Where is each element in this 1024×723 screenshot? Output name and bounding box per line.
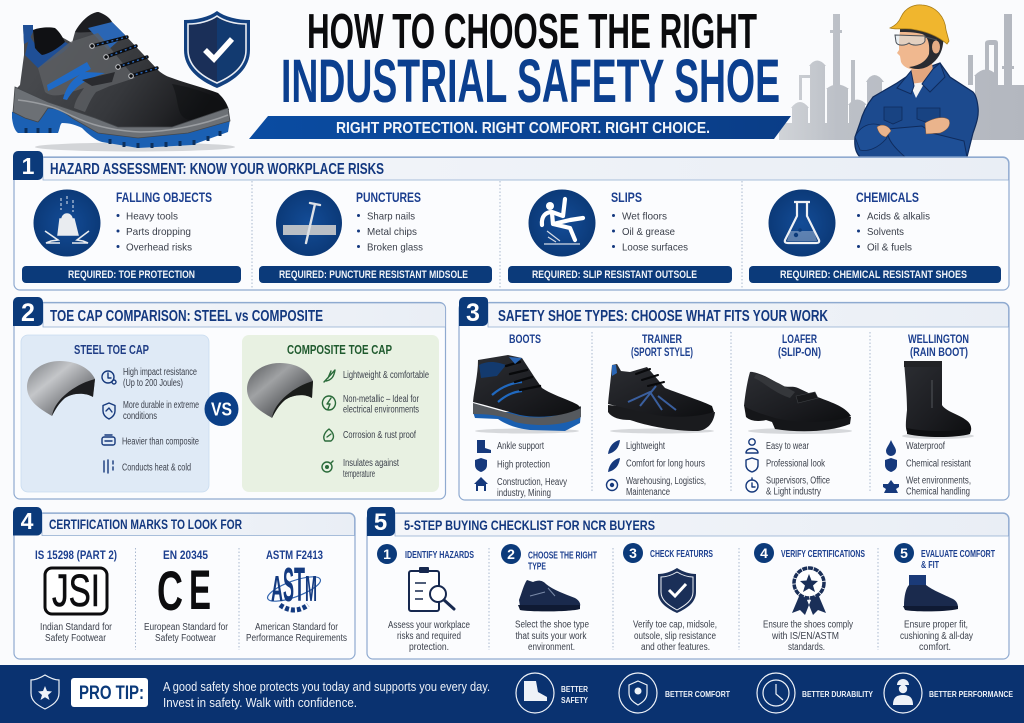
bullets	[857, 210, 930, 254]
feature icon: stopwatch	[746, 478, 758, 492]
trainer sole	[608, 405, 715, 431]
step title: & FIT	[921, 559, 939, 571]
caption	[144, 622, 229, 644]
icon: foot in shoe	[903, 575, 958, 611]
ribbon text: RIGHT PROTECTION. RIGHT COMFORT. RIGHT CHOICE.	[336, 120, 710, 137]
step text: Ensure the shoes comply	[763, 620, 853, 630]
requirement bar	[508, 266, 732, 283]
step text: Ensure proper fit,	[904, 620, 968, 630]
bullets: Overhead risks	[126, 242, 192, 254]
feature icon: boot	[477, 440, 491, 453]
feature text: Wet environments,	[906, 476, 971, 486]
shoe type: loafer	[744, 332, 852, 498]
step text: standards.	[788, 642, 825, 653]
boot outsole	[473, 412, 581, 431]
step text	[515, 620, 589, 653]
steel toe cap card	[21, 335, 209, 492]
mark: EN 20345	[144, 548, 229, 644]
icon: feather	[324, 370, 335, 382]
heel tab	[23, 25, 33, 44]
icon: slipping figure	[528, 190, 596, 256]
text: non-metallic: Non-metallic – Ideal for	[343, 394, 419, 405]
number tab	[13, 507, 42, 536]
feature text: Ankle support	[497, 441, 544, 452]
feature icon: feather	[608, 440, 620, 454]
panel 4: certification marks	[13, 507, 355, 659]
ASTM logo: T	[294, 559, 305, 612]
benefit: better durability	[757, 673, 874, 713]
step text: with IS/EN/ASTM	[771, 631, 839, 642]
worker safety glasses	[895, 35, 937, 45]
pro tip badge: PRO TIP:	[79, 683, 144, 704]
feature icon: shield	[746, 458, 758, 472]
step text: Assess your workplace	[388, 620, 470, 631]
worker face	[897, 30, 936, 70]
panel 2: toe cap comparison	[13, 297, 446, 499]
panel frame	[14, 513, 355, 659]
heading: HAZARD ASSESSMENT: KNOW YOUR WORKPLACE RISKS	[50, 161, 384, 178]
feature icon: house	[474, 477, 488, 491]
check mark	[205, 39, 232, 59]
step title: TYPE	[528, 560, 546, 572]
step text: protection.	[409, 642, 449, 653]
text: impact: (Up to 200 Joules)	[123, 378, 183, 389]
icon: shoe	[518, 580, 580, 611]
panel 5: buying checklist	[367, 507, 1009, 659]
label	[561, 685, 589, 705]
icon: durable shield	[103, 403, 115, 419]
step title: IDENTIFY HAZARDS	[405, 549, 474, 561]
feature text: Easy to wear	[766, 441, 809, 452]
pro tip badge	[71, 678, 148, 707]
title: WELLINGTON	[908, 332, 969, 346]
feature text: Chemical resistant	[906, 458, 971, 470]
upper	[15, 12, 229, 128]
caption: Safety Footwear	[155, 633, 217, 644]
label: BETTER COMFORT	[665, 690, 730, 699]
icon: shield with check	[658, 568, 696, 613]
bullets: Loose surfaces	[622, 242, 688, 254]
text: insulates: temperature	[343, 469, 375, 480]
pro tip text	[163, 679, 490, 710]
caption: Safety Footwear	[45, 633, 107, 644]
factory skyline	[779, 14, 1024, 140]
bullets: Solvents	[867, 226, 904, 238]
caption: European Standard for	[144, 622, 229, 633]
icon: star shield	[31, 675, 59, 709]
title: LOAFER	[782, 332, 817, 346]
toe shading	[172, 84, 228, 120]
outsole	[12, 100, 230, 148]
title: BOOTS	[509, 332, 541, 346]
step text: cushioning & all-day	[900, 631, 973, 642]
step text: that suits your work	[516, 631, 587, 642]
text: non-metallic: electrical environments	[343, 404, 419, 416]
worker illustration	[855, 5, 978, 157]
bullets: Broken glass	[367, 242, 423, 254]
caption	[246, 622, 347, 644]
icon: award badge	[792, 568, 826, 615]
card title: STEEL TOE CAP	[74, 342, 149, 357]
title line 1: HOW TO CHOOSE THE RIGHT	[307, 4, 757, 59]
hazard: falling objects	[22, 189, 241, 283]
mark: IS 15298	[35, 548, 117, 644]
card background	[21, 335, 209, 492]
heading: SLIPS	[611, 189, 642, 205]
bullets	[357, 210, 423, 254]
heading: FALLING OBJECTS	[116, 189, 212, 205]
step text: Select the shoe type	[515, 620, 589, 630]
bullets: Metal chips	[367, 226, 417, 238]
worker pockets	[884, 107, 940, 124]
step number: 1	[383, 546, 391, 562]
eyelets	[92, 46, 131, 76]
worker neck	[911, 62, 933, 88]
feature text: Maintenance	[626, 487, 670, 498]
bullets: Wet floors	[622, 210, 667, 222]
number: 5	[374, 509, 387, 536]
blue stripes	[47, 62, 105, 100]
feature icon: drop	[886, 440, 896, 456]
caption: American Standard for	[255, 622, 339, 633]
tongue label	[88, 22, 125, 50]
number tab	[367, 507, 395, 536]
panel frame	[14, 157, 1009, 290]
tread	[26, 128, 220, 148]
feature text: High protection	[497, 460, 550, 470]
shield with check icon	[184, 11, 250, 88]
label: BETTER DURABILITY	[802, 690, 874, 699]
feature text: Construction, Heavy	[497, 477, 567, 488]
step 2	[501, 544, 597, 653]
heading: 5-STEP BUYING CHECKLIST FOR NCR BUYERS	[404, 517, 655, 533]
heading: CERTIFICATION MARKS TO LOOK FOR	[49, 517, 242, 532]
step text	[388, 620, 470, 653]
title	[778, 332, 821, 359]
bullets	[612, 210, 688, 254]
header	[12, 4, 1024, 157]
ASTM logo: S	[283, 559, 294, 612]
step text: and other features.	[641, 642, 710, 653]
step 1	[377, 544, 474, 653]
feature icon: person	[746, 439, 758, 453]
midsole	[13, 87, 230, 138]
icon: nail through board	[276, 190, 342, 256]
ASTM logo: M	[305, 568, 317, 609]
panel frame	[14, 302, 446, 499]
footer background	[0, 665, 1024, 723]
icon: clock	[757, 673, 795, 713]
step title: CHOOSE THE RIGHT	[528, 550, 597, 562]
title: (RAIN BOOT)	[910, 345, 968, 359]
icon: bolt	[322, 396, 335, 410]
feature icon: shield	[475, 458, 487, 472]
feature text: Supervisors, Office	[766, 476, 830, 486]
requirement bar	[22, 266, 241, 283]
title: TRAINER	[642, 332, 682, 346]
bullets: Parts dropping	[126, 226, 191, 238]
text: impact: High impact resistance	[123, 367, 197, 378]
benefit: better safety	[516, 673, 589, 713]
worker upper forearm	[855, 124, 890, 151]
boot upper	[473, 355, 581, 417]
requirement bar: REQUIRED: SLIP RESISTANT OUTSOLE	[532, 269, 697, 281]
requirement bar	[259, 266, 492, 283]
title: (SLIP-ON)	[778, 345, 821, 359]
header band	[488, 303, 1008, 327]
ASTM logo: A	[271, 568, 283, 609]
step text	[900, 620, 973, 653]
mark: ASTM F2413	[246, 548, 347, 644]
title: (SPORT STYLE)	[631, 345, 693, 359]
feature icon: feather	[608, 458, 620, 472]
text: insulates: Insulates against	[343, 458, 399, 469]
hazard: chemicals	[749, 189, 1001, 283]
icon: worker	[884, 673, 922, 713]
number tab	[459, 297, 488, 326]
benefit: better performance	[884, 673, 1014, 713]
laces	[92, 37, 157, 76]
bullets: Sharp nails	[367, 210, 415, 222]
pro tip text: Invest in safety. Walk with confidence.	[163, 695, 357, 710]
composite toe cap card	[242, 335, 439, 492]
requirement bar: REQUIRED: PUNCTURE RESISTANT MIDSOLE	[279, 269, 468, 281]
icon: falling weight	[34, 190, 100, 256]
requirement bar	[749, 266, 1001, 283]
text: durable	[123, 400, 199, 422]
step number: 5	[900, 545, 908, 561]
VS badge	[204, 392, 238, 426]
number tab	[13, 151, 43, 180]
worker collar	[897, 63, 945, 94]
caption	[40, 622, 113, 644]
text: lightweight: Lightweight & comfortable	[343, 370, 429, 381]
step 5	[894, 543, 995, 653]
subtitle ribbon	[249, 116, 791, 139]
shoe type: wellington	[883, 332, 974, 498]
number: 1	[22, 153, 35, 179]
trainer illustration	[608, 364, 715, 434]
benefit: better comfort	[619, 673, 730, 713]
worker body	[855, 63, 978, 157]
worker hair and ear	[900, 27, 945, 69]
composite cap illustration	[247, 363, 313, 418]
steel cap illustration	[27, 361, 95, 416]
step text: outsole, slip resistance	[634, 631, 716, 642]
worker hands	[877, 118, 950, 137]
step text: risks and required	[397, 631, 461, 642]
trainer upper	[608, 364, 714, 417]
icon: clipboard and magnifier	[409, 567, 454, 611]
number tab	[13, 297, 43, 326]
label: BETTER	[561, 685, 588, 694]
text: durable: conditions	[123, 411, 157, 422]
shield body	[184, 11, 250, 88]
bullets: Acids & alkalis	[867, 210, 930, 222]
icon: impact gauge	[102, 371, 116, 384]
heading: TOE CAP COMPARISON: STEEL vs COMPOSITE	[50, 308, 323, 325]
step text: comfort.	[919, 642, 951, 653]
step title	[921, 548, 995, 571]
step text	[633, 620, 717, 653]
step number: 2	[507, 546, 515, 562]
icon: weight	[102, 435, 115, 445]
step title: VERIFY CERTIFICATIONS	[781, 548, 865, 560]
requirement bar: REQUIRED: CHEMICAL RESISTANT SHOES	[780, 269, 967, 281]
panel frame	[367, 513, 1009, 659]
feature text: Comfort for long hours	[626, 458, 705, 470]
title: IS 15298 (PART 2)	[35, 548, 117, 562]
bullets: Oil & fuels	[867, 242, 912, 254]
VS badge: VS	[211, 400, 232, 420]
feature text: Lightweight	[626, 441, 665, 452]
text: durable: More durable in extreme	[123, 400, 199, 411]
icon: flask	[768, 190, 836, 256]
panel 1: hazard assessment	[13, 151, 1009, 290]
wellington illustration	[902, 361, 974, 439]
text: conducts: Conducts heat & cold	[122, 462, 191, 474]
shoe type: boots	[473, 332, 581, 499]
boot midsole	[473, 403, 581, 425]
step 4	[754, 543, 865, 653]
title	[908, 332, 969, 359]
worker undershirt	[910, 82, 925, 98]
requirement bar: REQUIRED: TOE PROTECTION	[68, 269, 195, 281]
hazard: punctures	[259, 189, 492, 283]
grey eyestay	[38, 33, 135, 112]
title: ASTM F2413	[266, 548, 323, 562]
feature text: Waterproof	[906, 441, 945, 452]
step number: 4	[760, 545, 768, 561]
mesh panel	[82, 72, 115, 86]
number: 2	[21, 299, 35, 327]
icon: shield	[619, 673, 657, 713]
feature text: industry, Mining	[497, 488, 551, 499]
step number: 3	[629, 545, 637, 561]
title: EN 20345	[163, 548, 208, 562]
boot illustration	[473, 355, 581, 434]
card title: COMPOSITE TOE CAP	[287, 342, 392, 357]
panel 3: safety shoe types	[459, 297, 1009, 500]
caption: Indian Standard for	[40, 622, 113, 633]
icon: insulation	[322, 461, 333, 472]
feature text	[906, 476, 971, 498]
heading: SAFETY SHOE TYPES: CHOOSE WHAT FITS YOUR WORK	[498, 308, 828, 325]
feature text	[497, 477, 567, 499]
label: BETTER PERFORMANCE	[929, 690, 1014, 699]
header band	[42, 514, 354, 536]
CE logo: C	[157, 559, 183, 622]
collar opening	[33, 27, 65, 55]
text: impact	[123, 367, 197, 389]
feature icon: hazard	[883, 480, 899, 493]
feature text: Warehousing, Logistics,	[626, 476, 706, 487]
icon: boot	[516, 673, 554, 713]
hazard: slips	[508, 189, 732, 283]
bullets: Oil & grease	[622, 226, 675, 238]
feature text: & Light industry	[766, 486, 821, 498]
label: SAFETY	[561, 696, 589, 705]
feature text: Professional look	[766, 458, 826, 470]
number: 3	[466, 299, 480, 327]
shoe shadow	[35, 142, 235, 152]
blue ankle collar	[25, 35, 70, 68]
pro tip text: A good safety shoe protects you today and supports you every day.	[163, 679, 490, 694]
caption: Performance Requirements	[246, 633, 347, 644]
title	[631, 332, 693, 359]
step text: environment.	[528, 642, 575, 653]
ribbon shape	[249, 116, 791, 139]
footer band	[0, 665, 1024, 723]
panel frame	[459, 302, 1009, 500]
step title: CHECK FEATURRS	[650, 548, 713, 560]
header band	[43, 303, 446, 327]
feature text	[766, 476, 830, 498]
text: heavier: Heavier than composite	[122, 436, 199, 448]
icon: corrosion	[324, 429, 333, 441]
header band	[43, 158, 1008, 180]
heading: CHEMICALS	[856, 189, 919, 205]
text: corrosion: Corrosion & rust proof	[343, 430, 416, 441]
step title	[528, 550, 597, 572]
feature icon: gear	[606, 480, 618, 490]
icon: thermometers	[104, 460, 113, 473]
tongue	[75, 12, 112, 32]
loafer illustration	[744, 372, 852, 434]
feature text: Chemical handling	[906, 486, 970, 498]
number: 4	[21, 508, 34, 534]
product shoe	[12, 12, 235, 152]
card background	[242, 335, 439, 492]
CE logo: E	[189, 558, 211, 621]
ISI logo: JSI	[52, 565, 100, 616]
worker hard hat	[890, 5, 949, 44]
header band	[395, 514, 1008, 536]
step 3	[623, 543, 717, 653]
heading: PUNCTURES	[356, 189, 421, 205]
shoe type: trainer	[606, 332, 715, 498]
text: insulates	[343, 458, 399, 480]
ASTM logo	[265, 559, 323, 612]
step text	[763, 620, 853, 653]
feature icon: shield	[885, 458, 897, 472]
bullets	[116, 210, 192, 254]
text: non-metallic	[343, 394, 419, 416]
bullets: Heavy tools	[126, 210, 178, 222]
step text: Verify toe cap, midsole,	[633, 620, 717, 630]
feature text	[626, 476, 706, 498]
worker lower forearm	[887, 126, 967, 157]
